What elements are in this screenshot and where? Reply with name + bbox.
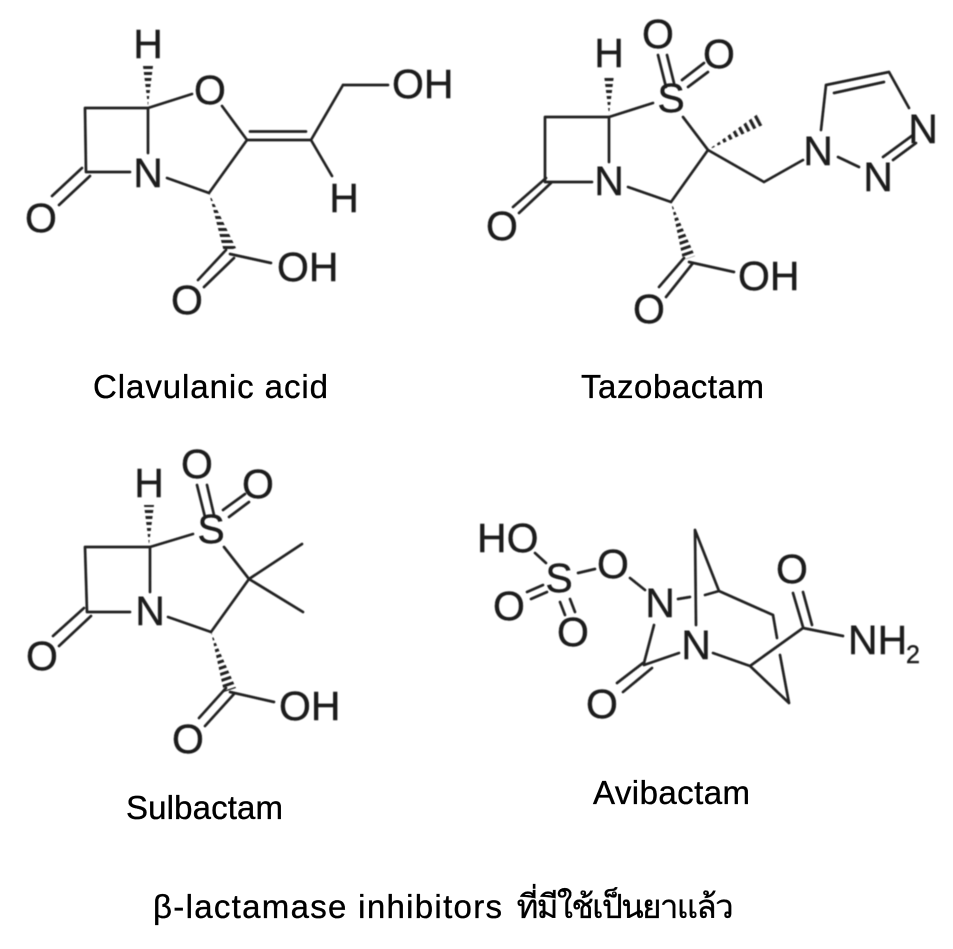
atom labels: O [172,716,204,762]
stereo hash bonds [144,505,154,545]
atom labels: OH [392,61,454,107]
atom labels: H [594,30,624,76]
panel: tazobactam [486,11,938,405]
atom labels: N [681,622,711,668]
stereo hash bonds [143,66,236,252]
title: β-lactamase inhibitors [153,888,502,925]
title: ที่มีใช้เป็นยาแล้ว [517,884,734,925]
atom labels: O [194,67,226,113]
title [153,884,734,925]
stereo hash bonds [604,75,614,115]
bonds [52,85,388,287]
atom labels: O [493,583,525,629]
atom labels: O [642,11,674,57]
atom labels: O [25,195,57,241]
panel: clavulanic acid [25,21,454,405]
atom labels: O [586,681,618,727]
panel: sulbactam [26,441,340,826]
bonds [527,530,843,703]
atom labels: O [486,203,518,249]
caption: sulbactam: Sulbactam [126,789,283,826]
atom labels: NH [848,617,907,663]
atom labels: OH [279,683,340,729]
atom labels: O [703,31,735,77]
structure: avibactam [477,515,920,727]
caption: avibactam: Avibactam [593,774,750,811]
caption: tazobactam: Tazobactam [581,368,764,405]
atom labels: N [645,580,675,626]
atom labels: H [329,175,359,221]
atom labels: N [908,106,938,152]
atom labels: O [242,461,274,507]
atom labels: N [133,150,163,196]
structure: tazobactam [486,11,938,332]
atom labels: N [863,154,893,200]
atom labels: S [197,506,225,552]
atom labels: O [26,633,58,679]
panel: avibactam [477,515,920,811]
structure: clavulanic acid [25,21,454,323]
atom labels [26,441,340,762]
atom labels: N [803,128,833,174]
atom labels: O [557,609,589,655]
structure: sulbactam [26,441,340,762]
bonds [513,55,916,297]
atom labels: S [657,75,685,121]
atom labels: O [776,546,808,592]
atom labels: S [545,555,573,601]
atom labels [486,11,938,332]
bonds [53,485,303,726]
atom labels: OH [277,244,338,290]
atom labels: O [171,277,203,323]
atom labels: O [633,286,665,332]
atom labels [25,21,454,323]
atom labels: H [134,460,164,506]
atom labels: O [597,541,629,587]
atom labels: HO [477,515,538,561]
atom labels: OH [738,253,800,299]
atom labels: N [135,588,165,634]
atom labels: N [594,158,624,204]
atom labels [477,515,920,727]
atom labels: O [181,441,213,487]
atom labels: 2 [906,641,920,669]
atom labels: H [133,21,163,67]
caption: clavulanic acid: Clavulanic acid [93,368,328,405]
